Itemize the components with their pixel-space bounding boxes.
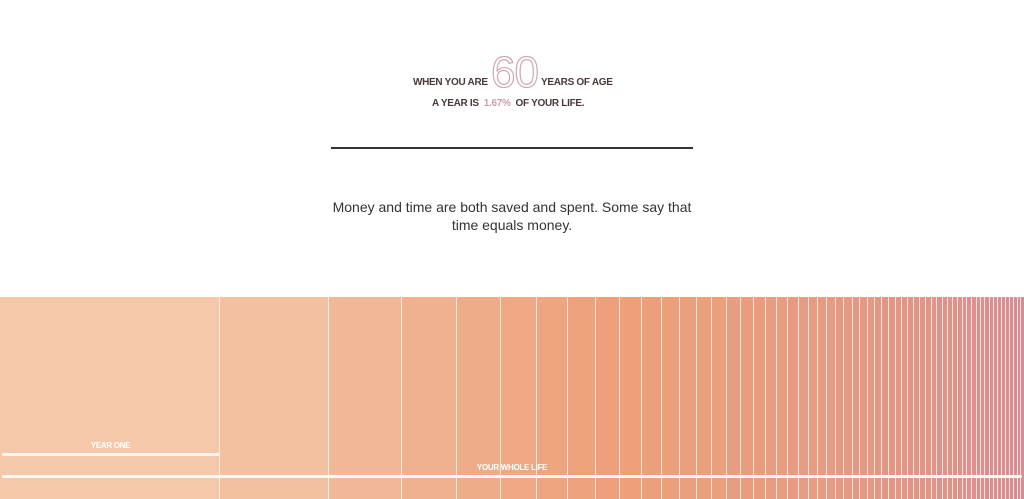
paragraph (333, 199, 692, 233)
rule (331, 147, 693, 149)
label: a year is 1.67% of your life: A YEAR IS 1.67% OF YOUR LIFE. (432, 98, 584, 109)
marker: year one (2, 441, 219, 456)
label: when you are: WHEN YOU ARE (413, 77, 488, 88)
label: year one: YEAR ONE (91, 441, 130, 450)
label: your whole life: YOUR WHOLE LIFE (477, 463, 547, 472)
label: years of age: YEARS OF AGE (541, 77, 613, 88)
headline (413, 53, 613, 109)
bracket line (2, 453, 219, 456)
bar chart: years of life (0, 297, 1024, 499)
paragraph: time equals money. (452, 217, 572, 233)
paragraph: Money and time are both saved and spent. Some say that (333, 199, 691, 215)
marker: your whole life (2, 463, 1022, 478)
bracket line (2, 475, 1022, 478)
